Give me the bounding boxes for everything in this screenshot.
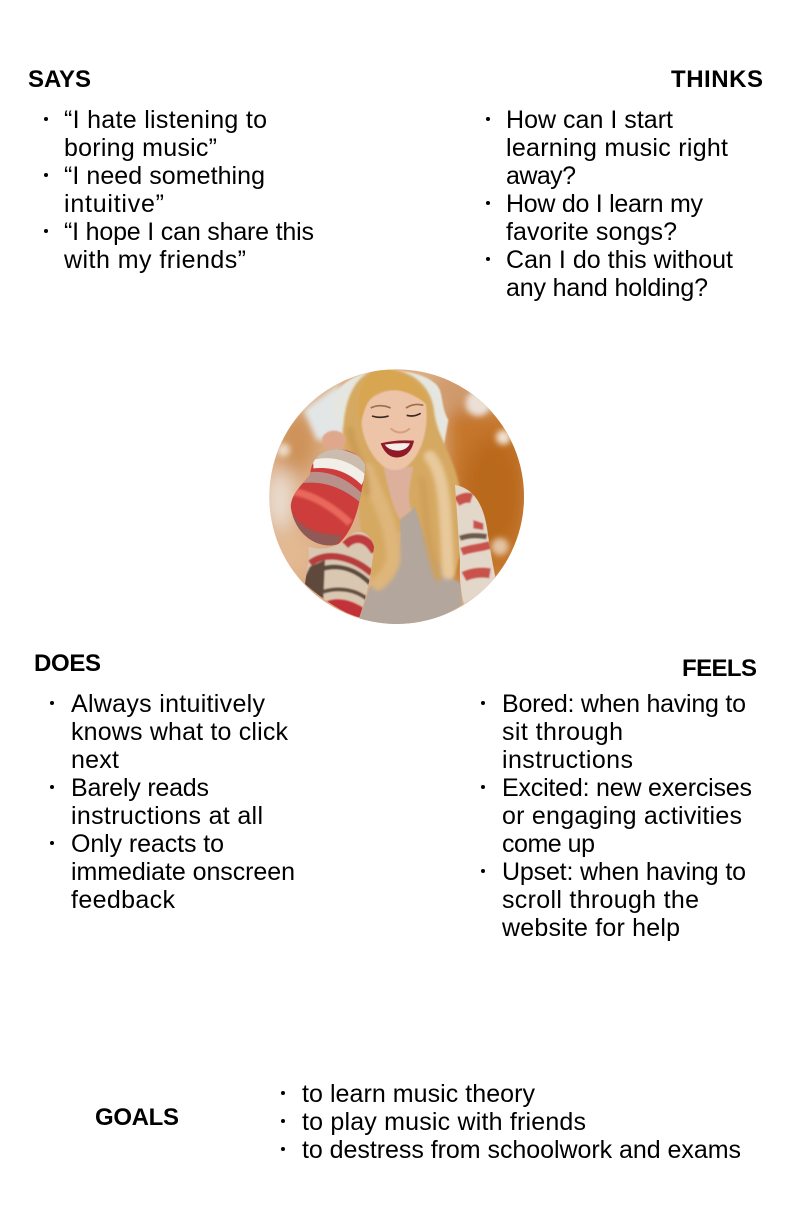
panel: thinks list: How can I start (506, 106, 673, 134)
panel: feels list: instructions (502, 746, 633, 774)
heading: feels: FEELS (682, 655, 757, 682)
panel: goals list: to play music with friends (302, 1108, 586, 1136)
panel: goals list: to destress from schoolwork and exams (302, 1136, 741, 1164)
heading: goals: GOALS (95, 1104, 179, 1131)
panel: goals list (281, 1080, 741, 1164)
panel: feels list: Excited: new exercises (502, 774, 752, 802)
panel: says list: “I hope I can share this (64, 218, 314, 246)
panel: does list: instructions at all (71, 802, 263, 830)
heading: does: DOES (34, 650, 101, 677)
panel: thinks list: away? (506, 162, 576, 190)
hair strands (350, 430, 448, 583)
panel: thinks list: any hand holding? (506, 274, 708, 302)
panel: says list: “I hate listening to (64, 106, 267, 134)
background bokeh (267, 367, 527, 627)
panel: does list: next (71, 746, 119, 774)
panel: does list: Only reacts to (71, 830, 224, 858)
panel: thinks list: Can I do this without (506, 246, 733, 274)
hair mass (343, 369, 462, 588)
front hair (358, 370, 428, 423)
panel: feels list: Upset: when having to (502, 858, 746, 886)
panel: feels list: website for help (501, 914, 680, 942)
panel: does list (50, 690, 295, 914)
hand (322, 431, 346, 449)
panel: says list: with my friends” (63, 246, 246, 274)
heading: says: SAYS (28, 66, 91, 93)
panel: goals list: to learn music theory (302, 1080, 536, 1108)
panel: says list: intuitive” (64, 190, 164, 218)
right sleeve (455, 485, 496, 604)
panel: thinks list: How do I learn my (506, 190, 704, 218)
panel: does list: Always intuitively (71, 690, 266, 718)
left sleeve lower (305, 532, 374, 618)
panel: thinks list: learning music right (506, 134, 728, 162)
panel: says list: “I need something (64, 162, 265, 190)
facial features (371, 404, 423, 457)
face (361, 390, 427, 470)
panel: feels list: sit through (502, 718, 623, 746)
panel: says list: boring music” (64, 134, 217, 162)
hat (332, 370, 448, 445)
panel: says list (44, 106, 314, 274)
heading: thinks: THINKS (671, 66, 763, 93)
left sleeve cuff and fist (290, 449, 366, 546)
panel: does list: knows what to click (71, 718, 288, 746)
panel: feels list: scroll through the (502, 886, 699, 914)
panel: feels list: or engaging activities (502, 802, 742, 830)
shirt (359, 507, 462, 627)
panel: thinks list (486, 106, 733, 302)
panel: feels list: come up (502, 830, 595, 858)
panel: does list: feedback (71, 886, 176, 914)
panel: does list: Barely reads (71, 774, 209, 802)
neck (383, 467, 413, 519)
photo: smiling woman in a knitted cardigan (265, 367, 533, 627)
panel: feels list: Bored: when having to (502, 690, 746, 718)
panel: thinks list: favorite songs? (506, 218, 677, 246)
panel: feels list (481, 690, 752, 942)
panel: does list: immediate onscreen (71, 858, 295, 886)
